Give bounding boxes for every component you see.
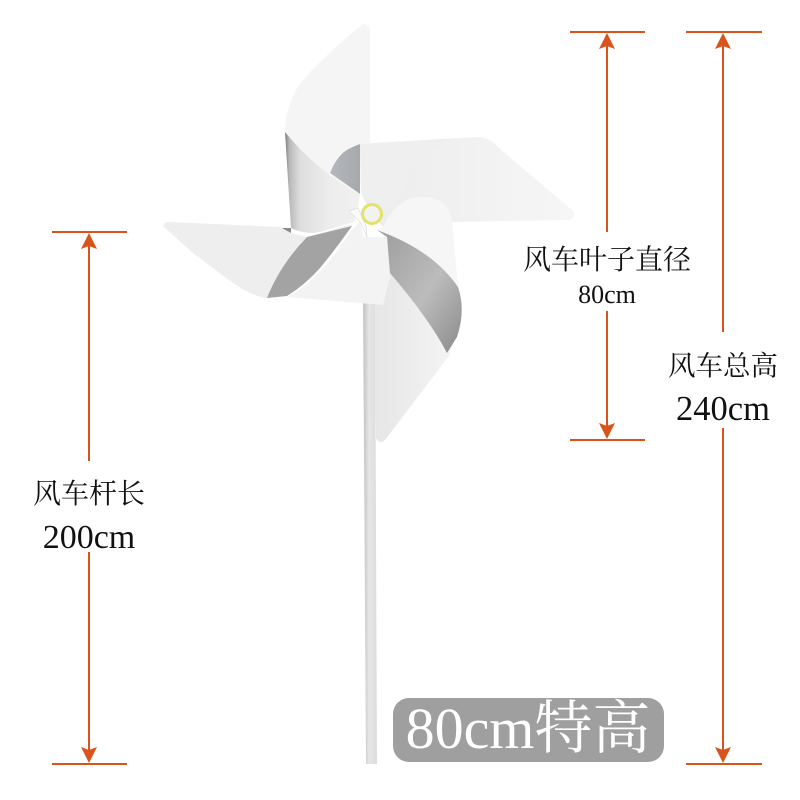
blade: bottom — [375, 230, 462, 442]
label: total height: 风车总高 — [668, 350, 778, 381]
blade: top — [279, 24, 370, 233]
pinwheel — [163, 24, 574, 442]
label: blade diameter: 风车叶子直径 — [523, 244, 691, 276]
badge: 80cm extra tall: 80cm特高 — [406, 696, 650, 761]
value: 80cm: 80cm — [578, 280, 636, 309]
blade: left — [163, 222, 353, 298]
dimension: total height 240cm — [668, 32, 778, 764]
value: 240cm: 240cm — [676, 390, 770, 428]
blade: lower front fold — [287, 222, 390, 305]
label: pole length: 风车杆长 — [33, 478, 145, 510]
blade: top back shadow — [330, 144, 360, 194]
dimension: blade diameter 80cm — [523, 32, 691, 440]
yellow hub ring — [362, 204, 382, 224]
dimension: pole length 200cm — [33, 232, 145, 764]
value: 200cm: 200cm — [43, 519, 135, 556]
hub crease — [349, 208, 367, 237]
pinwheel stick — [363, 295, 377, 764]
blade: right — [360, 137, 574, 287]
